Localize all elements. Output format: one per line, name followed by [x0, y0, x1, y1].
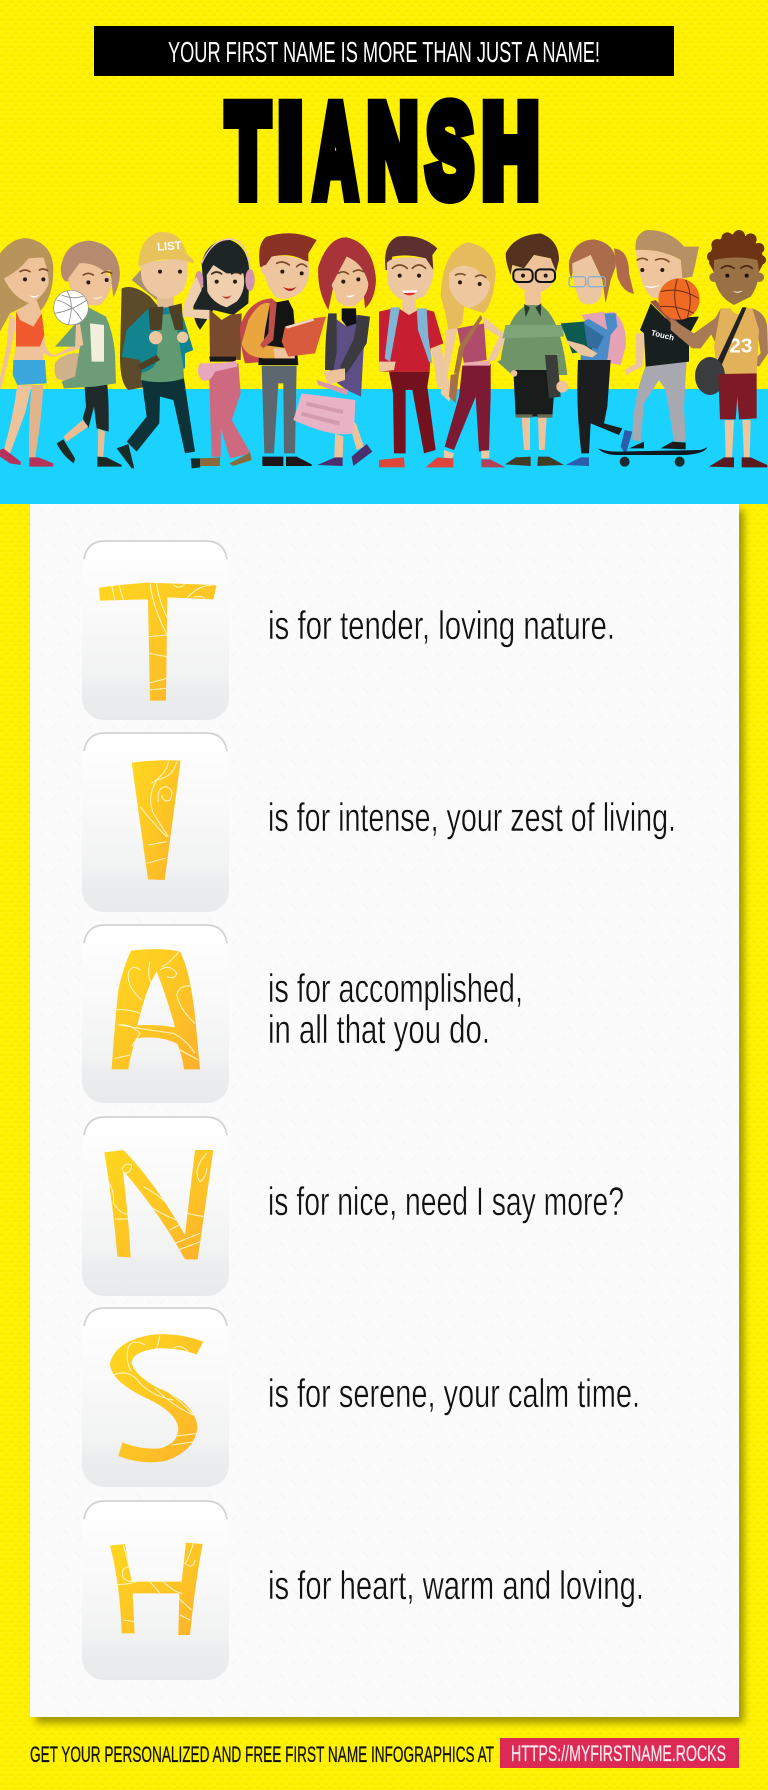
person: boy in yellow tank top — [695, 230, 768, 467]
row: N — [82, 1117, 624, 1296]
letter T — [99, 583, 217, 701]
hero: group of people, right half — [379, 230, 768, 467]
person: boy in red shirt — [379, 236, 454, 467]
title: name: A — [315, 80, 357, 223]
row: A — [82, 925, 523, 1103]
tile N — [82, 1117, 229, 1296]
person: girl in orange top — [0, 238, 80, 467]
text T: is for tender, loving nature. — [268, 604, 615, 648]
row: I — [82, 733, 676, 912]
row: H — [82, 1501, 644, 1680]
row: T — [82, 541, 615, 720]
title: name: S — [427, 79, 473, 222]
person: girl with headphones — [183, 239, 255, 466]
title: name: H — [482, 80, 539, 223]
row: S — [82, 1308, 640, 1487]
text S: is for serene, your calm time. — [268, 1372, 640, 1416]
person: hiker with cap and backpack: LIST — [157, 240, 182, 254]
person: boy in yellow tank top: 23 — [729, 335, 752, 358]
text N: is for nice, need I say more? — [268, 1180, 624, 1224]
tile S — [82, 1308, 229, 1487]
person: skater with basketball — [598, 230, 721, 467]
tile T — [82, 541, 229, 720]
letter I — [132, 760, 181, 880]
letter H — [110, 1543, 203, 1635]
title: name: I — [278, 80, 302, 223]
letter S — [110, 1334, 203, 1462]
hero: group of people, left half — [0, 232, 376, 468]
header banner — [94, 26, 674, 76]
title: name — [227, 79, 539, 223]
panel: letter meanings — [30, 504, 744, 1723]
person: hiker with cap and backpack — [117, 232, 203, 468]
person: blonde girl — [427, 242, 507, 467]
person: boy with glasses — [497, 233, 568, 466]
person: boy with book — [240, 233, 326, 466]
text H: is for heart, warm and loving. — [268, 1564, 644, 1608]
tile A — [82, 925, 229, 1103]
person: skater with basketball: Touch — [650, 328, 675, 343]
letter N — [104, 1150, 213, 1259]
text A: in all that you do. — [268, 1008, 490, 1052]
person: red-haired girl with pink bag — [293, 237, 376, 466]
title: name: N — [368, 79, 418, 222]
footer text: GET YOUR PERSONALIZED AND FREE FIRST NAME INFOGRAPHICS AT — [30, 1742, 494, 1767]
text A — [268, 967, 523, 1052]
tile H — [82, 1501, 229, 1680]
letter A — [112, 949, 200, 1069]
person: ponytail girl with tablet — [561, 239, 634, 466]
hero: cyan floor — [0, 389, 768, 504]
title: name: T — [227, 79, 269, 222]
text A: is for accomplished, — [268, 967, 523, 1011]
tile I — [82, 733, 229, 912]
person: girl with volleyball — [54, 241, 122, 467]
